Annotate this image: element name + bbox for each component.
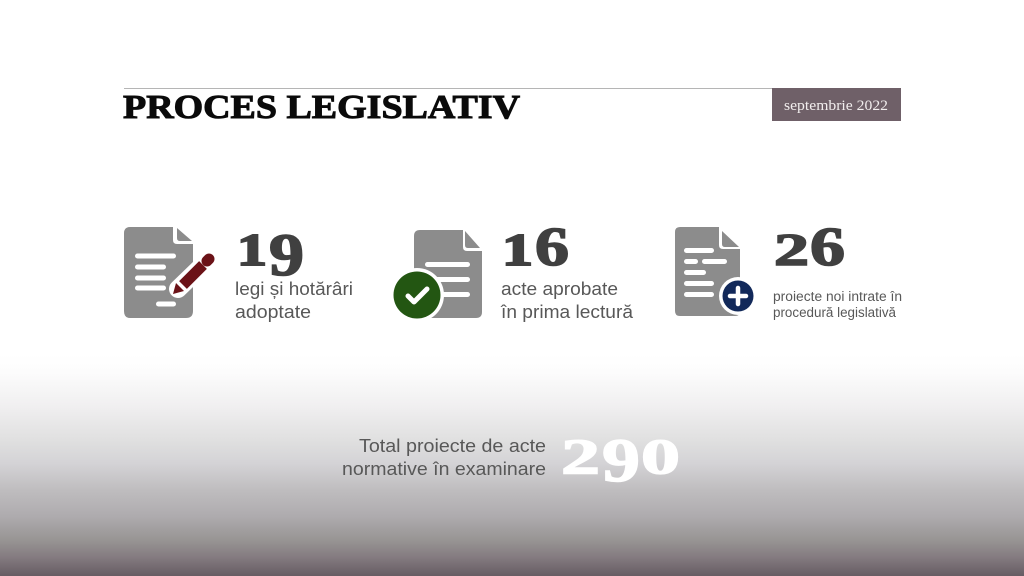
number 19 <box>237 222 304 288</box>
date badge <box>772 88 901 121</box>
number 16: 1 <box>502 224 533 275</box>
label: acte aprobate <box>501 278 618 299</box>
total number 290: 2 <box>561 428 600 484</box>
panel: first reading <box>390 216 634 322</box>
icon: document with check <box>390 230 482 322</box>
label: proiecte noi intrate în <box>773 289 902 304</box>
number 16 <box>502 216 569 277</box>
total label: normative în examinare <box>342 458 546 479</box>
panel: laws adopted <box>124 222 358 322</box>
number 16: 6 <box>535 216 569 277</box>
label: adoptate <box>235 301 311 322</box>
number 26 <box>774 216 845 277</box>
total number 290: 0 <box>641 428 680 484</box>
background gradient <box>0 355 1024 576</box>
number 26: 2 <box>774 224 809 275</box>
number 19: 1 <box>237 224 267 275</box>
panel: new projects <box>675 216 906 320</box>
total label: Total proiecte de acte <box>359 435 546 456</box>
label: în prima lectură <box>500 301 634 322</box>
total number 290: 9 <box>602 428 640 495</box>
number 19: 9 <box>269 222 304 288</box>
icon: document with plus <box>675 227 757 316</box>
icon: document with pen <box>124 227 209 318</box>
number 26: 6 <box>810 216 845 277</box>
label: procedură legislativă <box>773 305 896 320</box>
total number 290 <box>561 428 680 495</box>
label: legi și hotărâri <box>235 278 353 299</box>
title: PROCES LEGISLATIV <box>123 89 520 126</box>
date badge: septembrie 2022 <box>784 98 888 114</box>
